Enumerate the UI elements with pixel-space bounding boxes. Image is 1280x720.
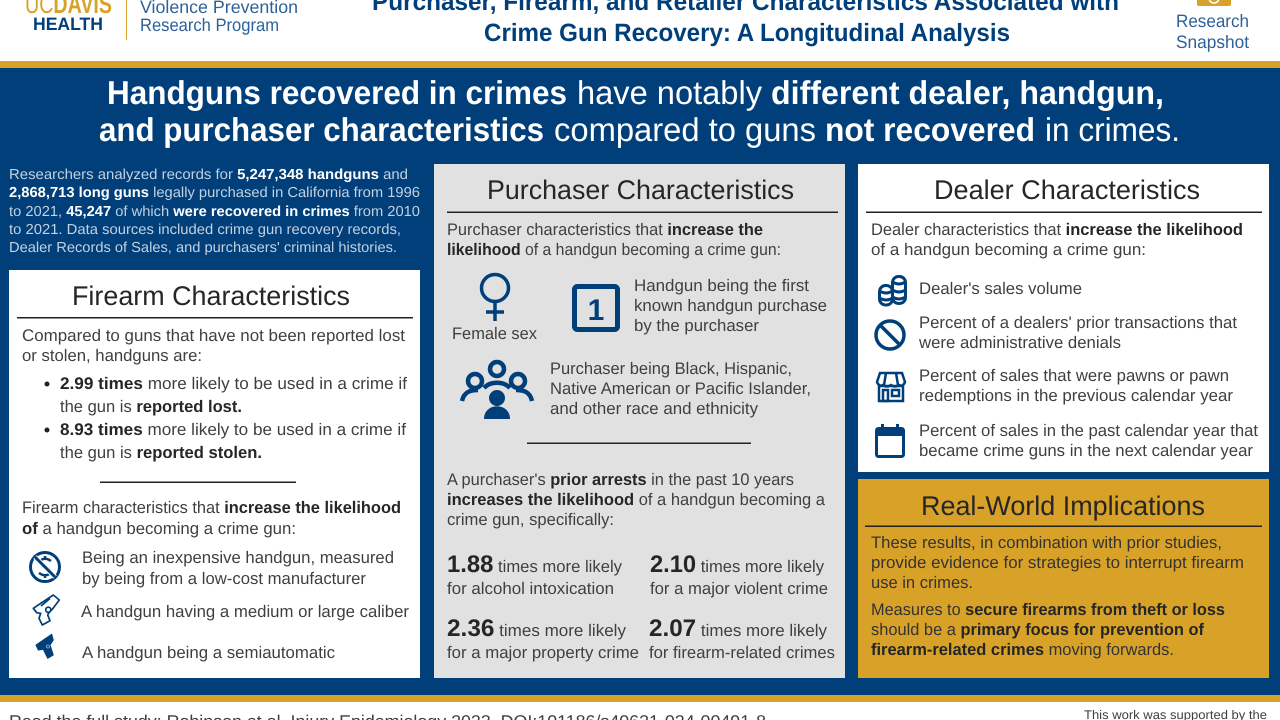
headline: have notably — [577, 74, 762, 111]
research snapshot badge — [1176, 0, 1249, 52]
text: inexpensive handgun: by being from a low-cost manufacturer — [82, 569, 366, 588]
study summary text: to 2021. Data sources included crime gun recovery records, — [9, 222, 401, 238]
logo: UC Davis Health — [25, 0, 127, 40]
headline: in crimes. — [1045, 111, 1180, 148]
prior arrests text: increases the likelihood of a handgun becoming a — [447, 490, 826, 509]
icon: number one box: 1 — [588, 294, 604, 327]
firearm characteristics intro — [22, 498, 401, 538]
program name: Research Program — [140, 15, 279, 35]
stat: firearm-related crimes: for firearm-related crimes — [649, 643, 835, 662]
headline: and purchaser characteristics — [99, 111, 544, 148]
stat: major violent crime — [650, 551, 828, 598]
firearm characteristics intro: of a handgun becoming a crime gun: — [22, 519, 296, 538]
implications paragraph two: firearm-related crimes moving forwards. — [871, 640, 1174, 659]
comparison intro: or stolen, handguns are: — [22, 346, 202, 365]
stat: major property crime — [447, 615, 639, 662]
text: crime guns next year: Percent of sales in the past calendar year that — [919, 421, 1258, 440]
text: administrative denials: Percent of a dealers' prior transactions that — [919, 313, 1237, 332]
dealer intro: of a handgun becoming a crime gun: — [871, 240, 1146, 259]
headline: different dealer, handgun, — [771, 74, 1164, 111]
study summary text: Dealer Records of Sales, and purchasers' criminal histories. — [9, 240, 397, 256]
heading: firearm characteristics: Firearm Characteristics — [72, 281, 350, 311]
stat: major property crime: for a major property crime — [447, 643, 639, 662]
heading: real-world implications: Real-World Implications — [921, 491, 1205, 521]
study summary text: 2,868,713 long guns legally purchased in California from 1996 — [9, 185, 420, 201]
purchaser intro: Purchaser characteristics that increase the — [447, 220, 763, 239]
firearm characteristics intro: Firearm characteristics that increase the likelihood — [22, 498, 401, 517]
panel: purchaser characteristics — [434, 164, 845, 678]
study summary text — [9, 167, 420, 256]
panel: real-world implications — [858, 479, 1269, 678]
program name — [140, 0, 298, 35]
text: first purchase: Handgun being the first — [634, 276, 809, 295]
icon: no dollar — [30, 552, 60, 582]
icon: female symbol — [482, 274, 508, 321]
text: semiautomatic: A handgun being a semiautomatic — [82, 643, 335, 662]
implications paragraph two: Measures to secure firearms from theft or loss — [871, 600, 1225, 619]
bottom gold bar — [0, 695, 1280, 702]
dealer intro — [871, 220, 1243, 259]
bullet list: likelihood statistics: 8.93 times more likely to be used in a crime if — [60, 420, 406, 439]
purchaser intro — [447, 220, 781, 259]
icon: coins — [880, 276, 906, 305]
text: sales volume: Dealer's sales volume — [919, 279, 1082, 298]
text: pawns: redemptions in the previous calendar year — [919, 386, 1233, 405]
implications paragraph one: provide evidence for strategies to interrupt firearm — [871, 553, 1244, 572]
stat: firearm-related crimes — [649, 615, 835, 662]
label: female sex: Female sex — [452, 324, 538, 343]
comparison intro — [22, 326, 405, 365]
stat: major property crime: 2.36 times more likely — [447, 615, 627, 642]
stat: major violent crime: for a major violent crime — [650, 579, 828, 598]
title: Crime Gun Recovery: A Longitudinal Analysis — [484, 19, 1010, 47]
implications paragraph two: should be a primary focus for prevention of — [871, 620, 1204, 639]
text: administrative denials — [918, 313, 1237, 352]
text: race and ethnicity: Native American or Pacific Islander, — [550, 379, 811, 398]
dealer intro: Dealer characteristics that increase the likelihood — [871, 220, 1243, 239]
bullet list: likelihood statistics: 2.99 times more likely to be used in a crime if — [60, 374, 407, 393]
text: first purchase: known handgun purchase — [634, 296, 827, 315]
bullet list: likelihood statistics — [44, 374, 407, 462]
text: administrative denials: were administrative denials — [918, 333, 1121, 352]
purchaser intro: likelihood of a handgun becoming a crime gun: — [447, 240, 781, 259]
stat: firearm-related crimes: 2.07 times more likely — [649, 615, 828, 642]
text: pawns — [919, 366, 1233, 405]
study summary text: Researchers analyzed records for 5,247,348 handguns and — [9, 167, 408, 183]
headline: compared to guns — [554, 111, 816, 148]
icon: storefront — [877, 373, 905, 401]
text: pawns: Percent of sales that were pawns or pawn — [919, 366, 1229, 385]
panel: dealer characteristics — [858, 164, 1269, 472]
headline: Handguns recovered in crimes — [107, 74, 567, 111]
stat: alcohol intoxication: for alcohol intoxication — [447, 579, 614, 598]
stat: alcohol intoxication: 1.88 times more likely — [447, 551, 623, 578]
bullet list: likelihood statistics: the gun is reported lost. — [60, 397, 242, 416]
panel: firearm characteristics — [9, 270, 420, 678]
implications paragraph two — [871, 600, 1225, 659]
text: caliber: A handgun having a medium or large caliber — [81, 602, 409, 621]
heading: purchaser characteristics: Purchaser Characteristics — [487, 175, 794, 205]
text: inexpensive handgun: Being an inexpensive handgun, measured — [82, 548, 394, 567]
logo: UC Davis Health: HEALTH — [33, 14, 103, 34]
text: race and ethnicity: Purchaser being Black, Hispanic, — [550, 359, 792, 378]
headline — [99, 74, 1180, 148]
icon: group of people — [462, 362, 532, 419]
comparison intro: Compared to guns that have not been reported lost — [22, 326, 405, 345]
text: first purchase: by the purchaser — [634, 316, 759, 335]
stat: alcohol intoxication — [447, 551, 623, 598]
text: race and ethnicity — [550, 359, 811, 418]
icon: solid handgun — [36, 634, 53, 658]
icon: calendar — [876, 424, 904, 456]
icon: prohibited sign — [876, 321, 904, 349]
title — [372, 0, 1119, 47]
research snapshot badge: Research — [1176, 11, 1249, 31]
prior arrests text: A purchaser's prior arrests in the past 10 years — [447, 470, 794, 489]
headline: not recovered — [825, 111, 1035, 148]
heading: dealer characteristics: Dealer Characteristics — [934, 175, 1200, 205]
research snapshot badge: Snapshot — [1176, 32, 1249, 52]
text: crime guns next year: became crime guns in the next calendar year — [919, 441, 1253, 460]
text: race and ethnicity: and other race and ethnicity — [550, 399, 759, 418]
bullet list: likelihood statistics: the gun is reported stolen. — [60, 443, 262, 462]
text: inexpensive handgun — [82, 548, 394, 588]
stat: major violent crime: 2.10 times more likely — [650, 551, 825, 578]
icon: number one box — [574, 286, 618, 330]
study summary text: to 2021, 45,247 of which were recovered in crimes from 2010 — [9, 204, 420, 220]
text: first purchase — [634, 276, 827, 335]
text: crime guns next year — [919, 421, 1258, 460]
icon: outline handgun — [33, 595, 59, 625]
prior arrests text: crime gun, specifically: — [447, 510, 614, 529]
implications paragraph one: These results, in combination with prior studies, — [871, 533, 1222, 552]
top gold bar — [0, 61, 1280, 68]
implications paragraph one — [871, 533, 1244, 592]
implications paragraph one: use in crimes. — [871, 573, 973, 592]
prior arrests text — [447, 470, 826, 529]
